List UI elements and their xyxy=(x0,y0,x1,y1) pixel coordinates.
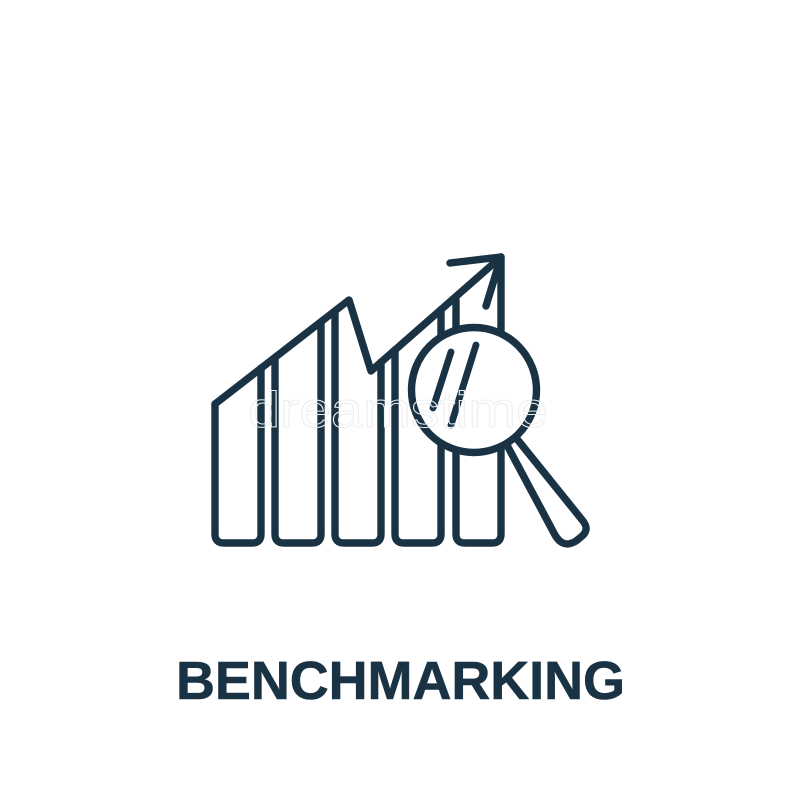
magnifier handle xyxy=(508,439,586,544)
arrow: rising trend line xyxy=(215,257,501,404)
bar chart xyxy=(215,257,501,543)
magnifier lens xyxy=(412,328,536,452)
icon: magnifying glass xyxy=(412,328,586,544)
title: BENCHMARKING xyxy=(176,651,625,711)
lens glare xyxy=(433,345,476,425)
icon: benchmarking chart with magnifier xyxy=(215,257,586,544)
watermark: dreamstime xyxy=(248,382,548,438)
